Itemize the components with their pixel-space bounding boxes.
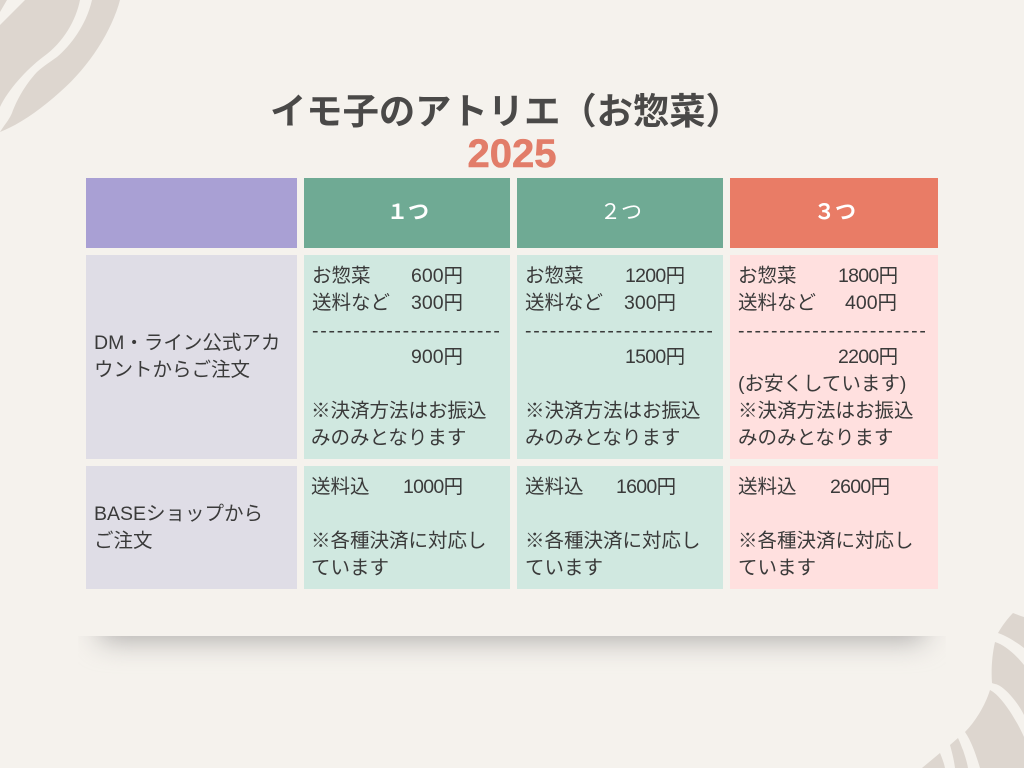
cell: DM three items: お惣菜 [738, 265, 797, 287]
cell: DM two items: 1200円 [625, 265, 684, 287]
cell: BASE one item: 1000円 [403, 476, 462, 498]
cell: DM one item: ※決済方法はお振込 [311, 400, 487, 422]
table header: 3つ [730, 178, 938, 248]
cell: BASE one item: ※各種決済に対応し [311, 530, 487, 552]
cell: BASE three items: 送料込 [738, 476, 797, 498]
cell: BASE two items: ※各種決済に対応し [525, 530, 701, 552]
cell: DM two items: 送料など [525, 292, 603, 314]
cell: BASE three items [730, 466, 938, 589]
cell: BASE one item: ています [311, 557, 389, 579]
cell: DM two items: 1500円 [625, 346, 684, 368]
table header: 2つ [517, 178, 723, 248]
table header: 2つ: ２つ [600, 201, 642, 224]
table header: 1つ [304, 178, 510, 248]
title: イモ子のアトリエ（お惣菜） [270, 91, 742, 132]
decoration: top-left leaf [0, 0, 120, 132]
cell: DM two items: お惣菜 [525, 265, 584, 287]
cell: DM three items: ----------------------- [738, 320, 928, 342]
cell: DM one item: 送料など [312, 292, 390, 314]
cell: DM three items: (お安くしています) [738, 373, 906, 395]
table header: blank label cell [86, 178, 297, 248]
cell: DM one item: みのみとなります [311, 427, 466, 449]
cell: DM one item: 300円 [411, 292, 463, 314]
cell: DM one item: お惣菜 [312, 265, 371, 287]
cell: BASE one item: 送料込 [311, 476, 370, 498]
decoration: shadow beneath table [88, 636, 936, 657]
cell: DM three items: ※決済方法はお振込 [738, 400, 914, 422]
cell: DM three items: 400円 [845, 292, 897, 314]
cell: BASE three items: ※各種決済に対応し [738, 530, 914, 552]
table header: 3つ: ３つ [814, 201, 856, 224]
cell: DM two items: ※決済方法はお振込 [525, 400, 701, 422]
cell: DM three items: みのみとなります [738, 427, 893, 449]
cell: DM three items: 1800円 [838, 265, 897, 287]
cell: BASE three items: 2600円 [830, 476, 889, 498]
cell: DM two items: みのみとなります [525, 427, 680, 449]
cell: BASE three items: ています [738, 557, 816, 579]
cell: BASE two items: 1600円 [616, 476, 675, 498]
cell: DM one item: 900円 [411, 346, 463, 368]
row label: DM and LINE order: ウントからご注文 [94, 359, 250, 381]
cell: DM one item: 600円 [411, 265, 463, 287]
cell: DM three items: 送料など [738, 292, 816, 314]
row label: DM and LINE order: DM・ライン公式アカ [94, 332, 280, 354]
cell: DM two items [517, 255, 723, 459]
cell: DM three items: 2200円 [838, 346, 897, 368]
cell: BASE two items [517, 466, 723, 589]
decoration: bottom-right leaf [922, 613, 1024, 768]
table header: 1つ: １つ [387, 201, 429, 224]
row label: BASE shop order: ご注文 [94, 530, 153, 552]
cell: BASE two items: 送料込 [525, 476, 584, 498]
row label: BASE shop order [86, 466, 297, 589]
cell: BASE two items: ています [525, 557, 603, 579]
subtitle: year: 2025 [468, 132, 556, 176]
cell: DM two items: 300円 [624, 292, 676, 314]
cell: DM two items: ----------------------- [525, 320, 715, 342]
cell: DM one item [304, 255, 510, 459]
cell: DM one item: ----------------------- [312, 320, 502, 342]
row label: BASE shop order: BASEショップから [94, 503, 263, 525]
cell: BASE one item [304, 466, 510, 589]
cell: DM three items [730, 255, 938, 459]
row label: DM and LINE order [86, 255, 297, 459]
